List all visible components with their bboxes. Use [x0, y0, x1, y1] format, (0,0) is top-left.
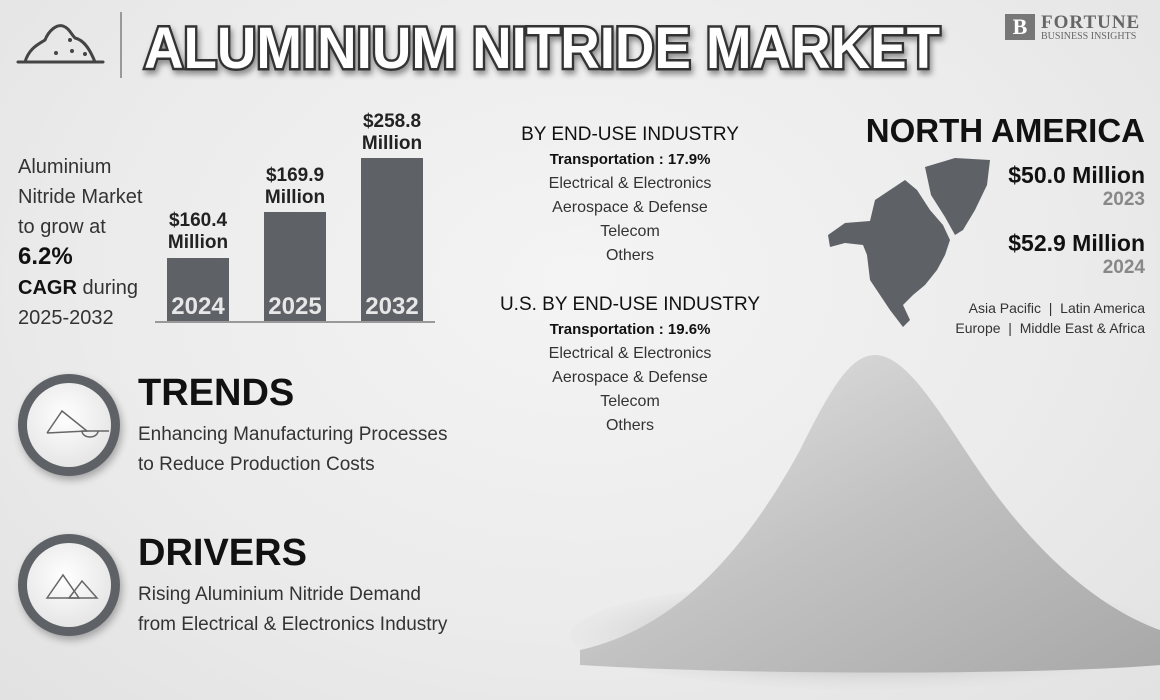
trends: [16, 372, 447, 484]
CAGR text: Aluminium: [18, 156, 111, 178]
CAGR text: [18, 156, 142, 329]
bar chart: 2025: [268, 293, 322, 320]
bar chart: $258.8: [363, 111, 421, 132]
end-use industry: Others: [606, 247, 654, 264]
CAGR text: to grow at: [18, 216, 106, 238]
drivers: from Electrical & Electronics Industry: [138, 614, 447, 635]
end-use industry: Telecom: [600, 223, 660, 240]
North America: $50.0 Million: [1008, 162, 1145, 188]
logo: BUSINESS INSIGHTS: [1041, 31, 1136, 42]
bar chart: 2032: [365, 293, 419, 320]
trends: Enhancing Manufacturing Processes: [138, 424, 447, 445]
US end-use industry: Transportation : 19.6%: [550, 321, 710, 338]
end-use industry: Aerospace & Defense: [552, 199, 708, 216]
logo: [1005, 12, 1140, 42]
end-use industry: [521, 124, 739, 264]
end-use industry: Transportation : 17.9%: [550, 151, 710, 168]
North America: Europe | Middle East & Africa: [955, 320, 1145, 336]
bar chart: $160.4: [169, 210, 227, 231]
CAGR text: 6.2%: [18, 243, 73, 270]
powder pile: [580, 355, 1160, 681]
US end-use industry: Telecom: [600, 393, 660, 410]
bar chart: 2024: [171, 293, 225, 320]
US end-use industry: Aerospace & Defense: [552, 369, 708, 386]
drivers: Rising Aluminium Nitride Demand: [138, 584, 421, 605]
US end-use industry: Others: [606, 417, 654, 434]
North America: 2024: [1103, 257, 1145, 278]
North America: 2023: [1103, 189, 1145, 210]
North America: NORTH AMERICA: [866, 112, 1145, 149]
bar chart: Million: [265, 187, 325, 208]
CAGR text: Nitride Market: [18, 186, 142, 208]
map: [828, 158, 990, 327]
bar chart: Million: [168, 232, 228, 253]
bar chart: Million: [362, 133, 422, 154]
US end-use industry: [500, 294, 760, 434]
US end-use industry: Electrical & Electronics: [549, 345, 711, 362]
US end-use industry: U.S. BY END-USE INDUSTRY: [500, 294, 760, 315]
North America: [828, 112, 1146, 336]
trends: TRENDS: [138, 372, 294, 414]
bar chart: [155, 111, 435, 323]
logo: FORTUNE: [1041, 12, 1140, 33]
end-use industry: BY END-USE INDUSTRY: [521, 124, 739, 145]
icon: drivers: [18, 534, 120, 636]
CAGR text: CAGR during: [18, 277, 138, 299]
header icon: [16, 24, 104, 64]
North America: $52.9 Million: [1008, 230, 1145, 256]
drivers: [16, 532, 448, 644]
North America: Asia Pacific | Latin America: [969, 300, 1145, 316]
logo: B: [1013, 14, 1027, 39]
drivers: DRIVERS: [138, 532, 307, 574]
bar chart: $169.9: [266, 165, 324, 186]
CAGR text: 2025-2032: [18, 307, 114, 329]
icon: trends: [18, 374, 120, 476]
end-use industry: Electrical & Electronics: [549, 175, 711, 192]
trends: to Reduce Production Costs: [138, 454, 375, 475]
